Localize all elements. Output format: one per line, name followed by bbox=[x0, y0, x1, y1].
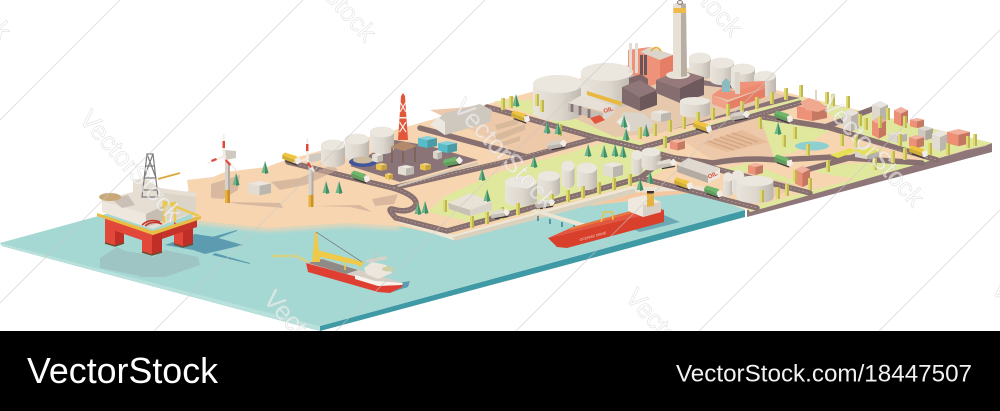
offshore oil rig bbox=[97, 154, 201, 255]
power plant yard bbox=[535, 72, 790, 137]
drilling tower bbox=[390, 93, 417, 163]
trucks bbox=[282, 106, 928, 224]
tanker hull bbox=[548, 210, 664, 248]
watermark text: VectorStock bbox=[448, 92, 563, 216]
rig yellow deck bbox=[97, 213, 201, 235]
small sand building bbox=[248, 181, 271, 195]
hangar on sand bbox=[430, 104, 492, 135]
yellow stinger bbox=[272, 256, 310, 263]
rig reflection on water bbox=[100, 247, 200, 277]
land base bbox=[187, 59, 992, 238]
yard equipment and containers bbox=[349, 150, 442, 180]
watermark text: VectorStock bbox=[816, 89, 931, 213]
watermark text: VectorStock bbox=[620, 282, 735, 406]
green cone trees bbox=[232, 94, 782, 215]
ship name: OCEANIC DRIVE bbox=[579, 231, 608, 242]
pond bbox=[795, 142, 829, 150]
oil warehouse by power plant bbox=[568, 96, 615, 121]
rig beams bbox=[105, 217, 197, 244]
white hull band bbox=[355, 275, 403, 286]
rig shadow on water bbox=[165, 230, 250, 264]
helideck bbox=[99, 193, 121, 201]
tanker shadow bbox=[625, 215, 680, 232]
vessel superstructure bbox=[364, 250, 394, 279]
power plant tall chimney bbox=[533, 0, 776, 121]
deck machinery bbox=[570, 210, 640, 229]
rig left leg bbox=[105, 220, 124, 246]
shadows on sand bbox=[211, 165, 398, 212]
footer image id: VectorStock.com/18447507 bbox=[676, 360, 972, 388]
watermark text: VectorStock bbox=[258, 284, 373, 408]
back refinery tanks bbox=[321, 127, 394, 167]
rig white modules bbox=[102, 178, 196, 229]
vessel deck bbox=[306, 258, 403, 283]
jetty bbox=[530, 209, 590, 230]
deck crane bbox=[601, 212, 613, 222]
vessel shadow bbox=[392, 281, 410, 292]
black footer bar bbox=[0, 331, 1000, 411]
plant hangars and low tank bbox=[590, 97, 710, 132]
tanker deck bbox=[548, 205, 664, 238]
vessel hull bbox=[306, 263, 403, 293]
wind turbine 1 bbox=[207, 134, 238, 203]
road network bbox=[288, 103, 937, 231]
lime poplar rows bbox=[443, 85, 977, 228]
quay and harbour wall bbox=[397, 186, 745, 241]
pipelay vessel bbox=[272, 232, 410, 293]
rig right leg bbox=[174, 222, 193, 247]
watermark text: VectorStock bbox=[74, 104, 189, 228]
rig crane arm bbox=[158, 173, 180, 179]
red pipes bbox=[142, 221, 162, 226]
gas station bbox=[830, 146, 883, 159]
yellow crane bbox=[164, 202, 199, 223]
yard fence bbox=[398, 163, 478, 186]
oil warehouse by power plant: OIL bbox=[603, 106, 614, 115]
furrowed soil pad bbox=[702, 130, 768, 152]
tanker ship bbox=[548, 191, 680, 248]
vessel crane bbox=[312, 232, 364, 270]
oil warehouse on lower road: OIL bbox=[707, 171, 719, 181]
harbour tanks and warehouse bbox=[448, 148, 660, 216]
teal offices bbox=[418, 136, 457, 153]
terraced quarry bbox=[495, 118, 525, 146]
superstructure bbox=[628, 191, 661, 217]
pink ground plots bbox=[430, 105, 800, 200]
rig front leg bbox=[142, 232, 162, 255]
footer brand: VectorStock bbox=[27, 350, 219, 391]
dark industrial yards bbox=[350, 72, 800, 182]
wind turbine 2 bbox=[293, 138, 321, 207]
sea base bbox=[0, 160, 760, 331]
town buildings bbox=[670, 90, 970, 187]
oil warehouse on lower road bbox=[677, 158, 774, 203]
derrick bbox=[142, 154, 158, 197]
grass areas bbox=[428, 97, 992, 232]
